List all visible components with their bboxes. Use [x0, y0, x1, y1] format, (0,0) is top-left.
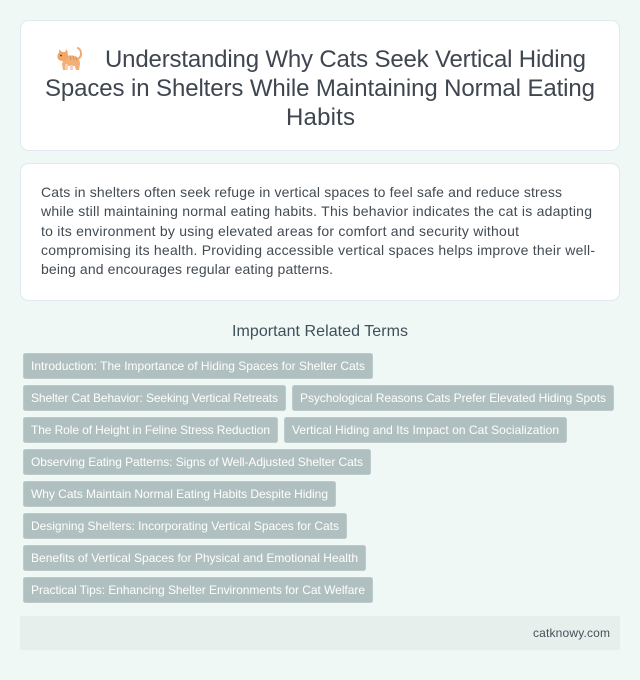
chip	[24, 482, 336, 506]
chip: Why Cats Maintain Normal Eating Habits Despite Hiding	[31, 487, 328, 501]
title text	[45, 46, 595, 131]
chip	[24, 578, 372, 602]
footer	[20, 616, 620, 650]
chip	[292, 386, 614, 410]
title text: Habits	[286, 104, 355, 131]
chip: Designing Shelters: Incorporating Vertical Spaces for Cats	[31, 519, 339, 533]
chip	[24, 514, 346, 538]
heading: important related terms: Important Related Terms	[232, 323, 408, 340]
chip	[24, 546, 366, 570]
chip	[24, 354, 372, 378]
chip	[24, 450, 370, 474]
chip: Observing Eating Patterns: Signs of Well-Adjusted Shelter Cats	[31, 455, 363, 469]
panel: title card	[20, 20, 620, 150]
title text: Understanding Why Cats Seek Vertical Hiding	[105, 46, 586, 73]
chip: Psychological Reasons Cats Prefer Elevated Hiding Spots	[300, 391, 606, 405]
chip: Introduction: The Importance of Hiding Spaces for Shelter Cats	[31, 359, 365, 373]
description text: compromising its health. Providing accessible vertical spaces helps improve their well-	[41, 242, 595, 258]
description text: while still maintaining normal eating habits. This behavior indicates the cat is adapting	[40, 203, 592, 219]
chip	[24, 386, 286, 410]
panel: description	[20, 164, 620, 300]
chip	[24, 418, 278, 442]
description text: to its environment by using elevated areas for comfort and security without	[41, 223, 519, 239]
icon: cat	[57, 48, 81, 70]
title text: Spaces in Shelters While Maintaining Normal Eating	[45, 75, 595, 102]
chip: Vertical Hiding and Its Impact on Cat Socialization	[292, 423, 559, 437]
panel: related term chips	[24, 354, 614, 602]
chip: Benefits of Vertical Spaces for Physical and Emotional Health	[31, 551, 358, 565]
footer: catknowy.com	[533, 626, 610, 640]
description text: being and encourages regular eating patterns.	[41, 261, 333, 277]
chip: Shelter Cat Behavior: Seeking Vertical Retreats	[31, 391, 278, 405]
description text: Cats in shelters often seek refuge in vertical spaces to feel safe and reduce stress	[41, 184, 562, 200]
chip: The Role of Height in Feline Stress Reduction	[31, 423, 270, 437]
chip	[284, 418, 566, 442]
description text	[40, 184, 595, 277]
chip: Practical Tips: Enhancing Shelter Environments for Cat Welfare	[31, 583, 365, 597]
